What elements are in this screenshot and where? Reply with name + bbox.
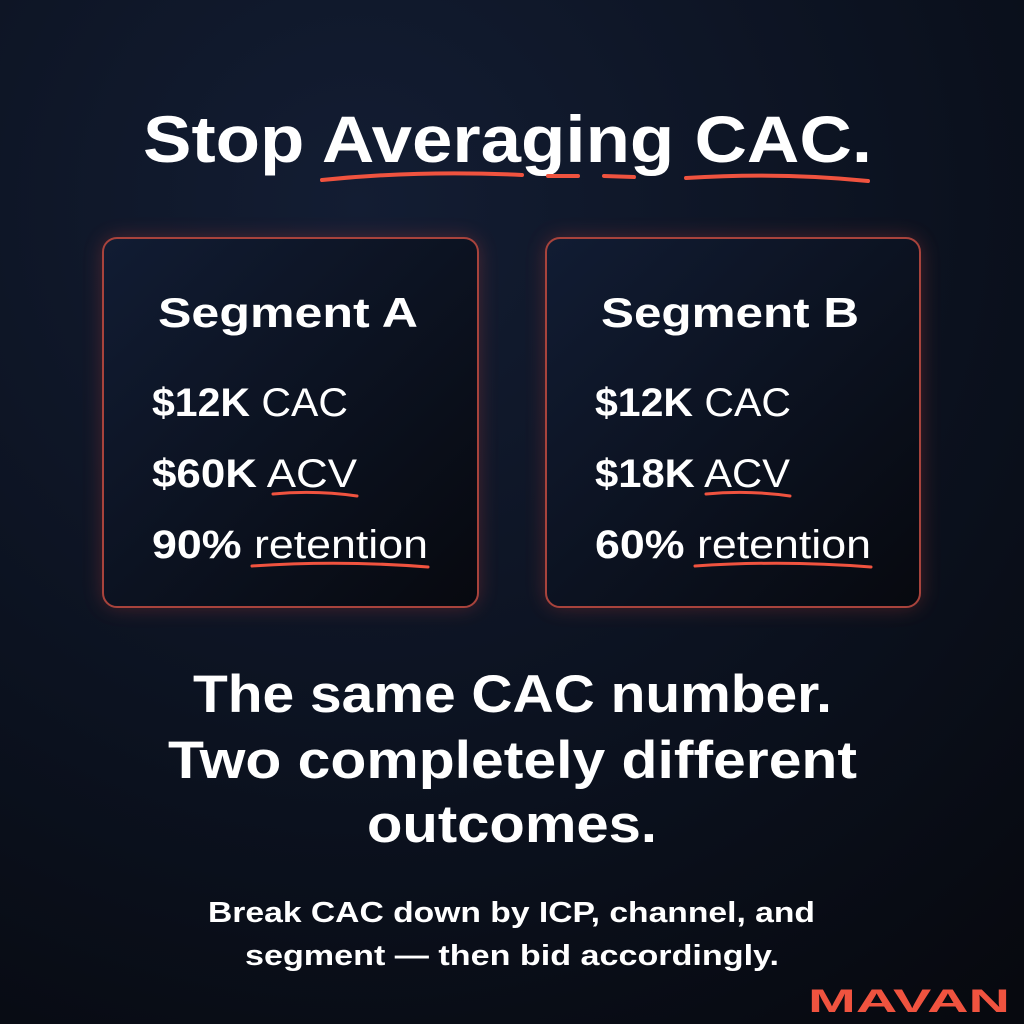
stat: retention: 90% retention [152, 523, 428, 567]
panel: segment B [546, 238, 920, 607]
footer text [208, 897, 815, 972]
stat: CAC: $12K CAC [595, 381, 791, 425]
stat: ACV: $60K ACV [152, 452, 357, 496]
heading: Segment A: Segment A [158, 289, 418, 336]
heading: Segment B: Segment B [601, 289, 859, 336]
headline statement: outcomes. [367, 795, 657, 854]
stat: retention: 60% retention [595, 523, 871, 567]
headline statement: The same CAC number. [193, 665, 832, 724]
title underline [322, 173, 868, 181]
stat: CAC: $12K CAC [152, 381, 348, 425]
title: Stop Averaging CAC. [143, 102, 872, 176]
stat: ACV: $18K ACV [595, 452, 790, 496]
footer text: segment — then bid accordingly. [245, 940, 779, 972]
panel: segment A [103, 238, 478, 607]
footer text: Break CAC down by ICP, channel, and [208, 897, 815, 929]
headline statement: Two completely different [168, 731, 857, 790]
headline statement [168, 665, 857, 854]
logo: MAVAN: MAVAN [808, 983, 1010, 1019]
